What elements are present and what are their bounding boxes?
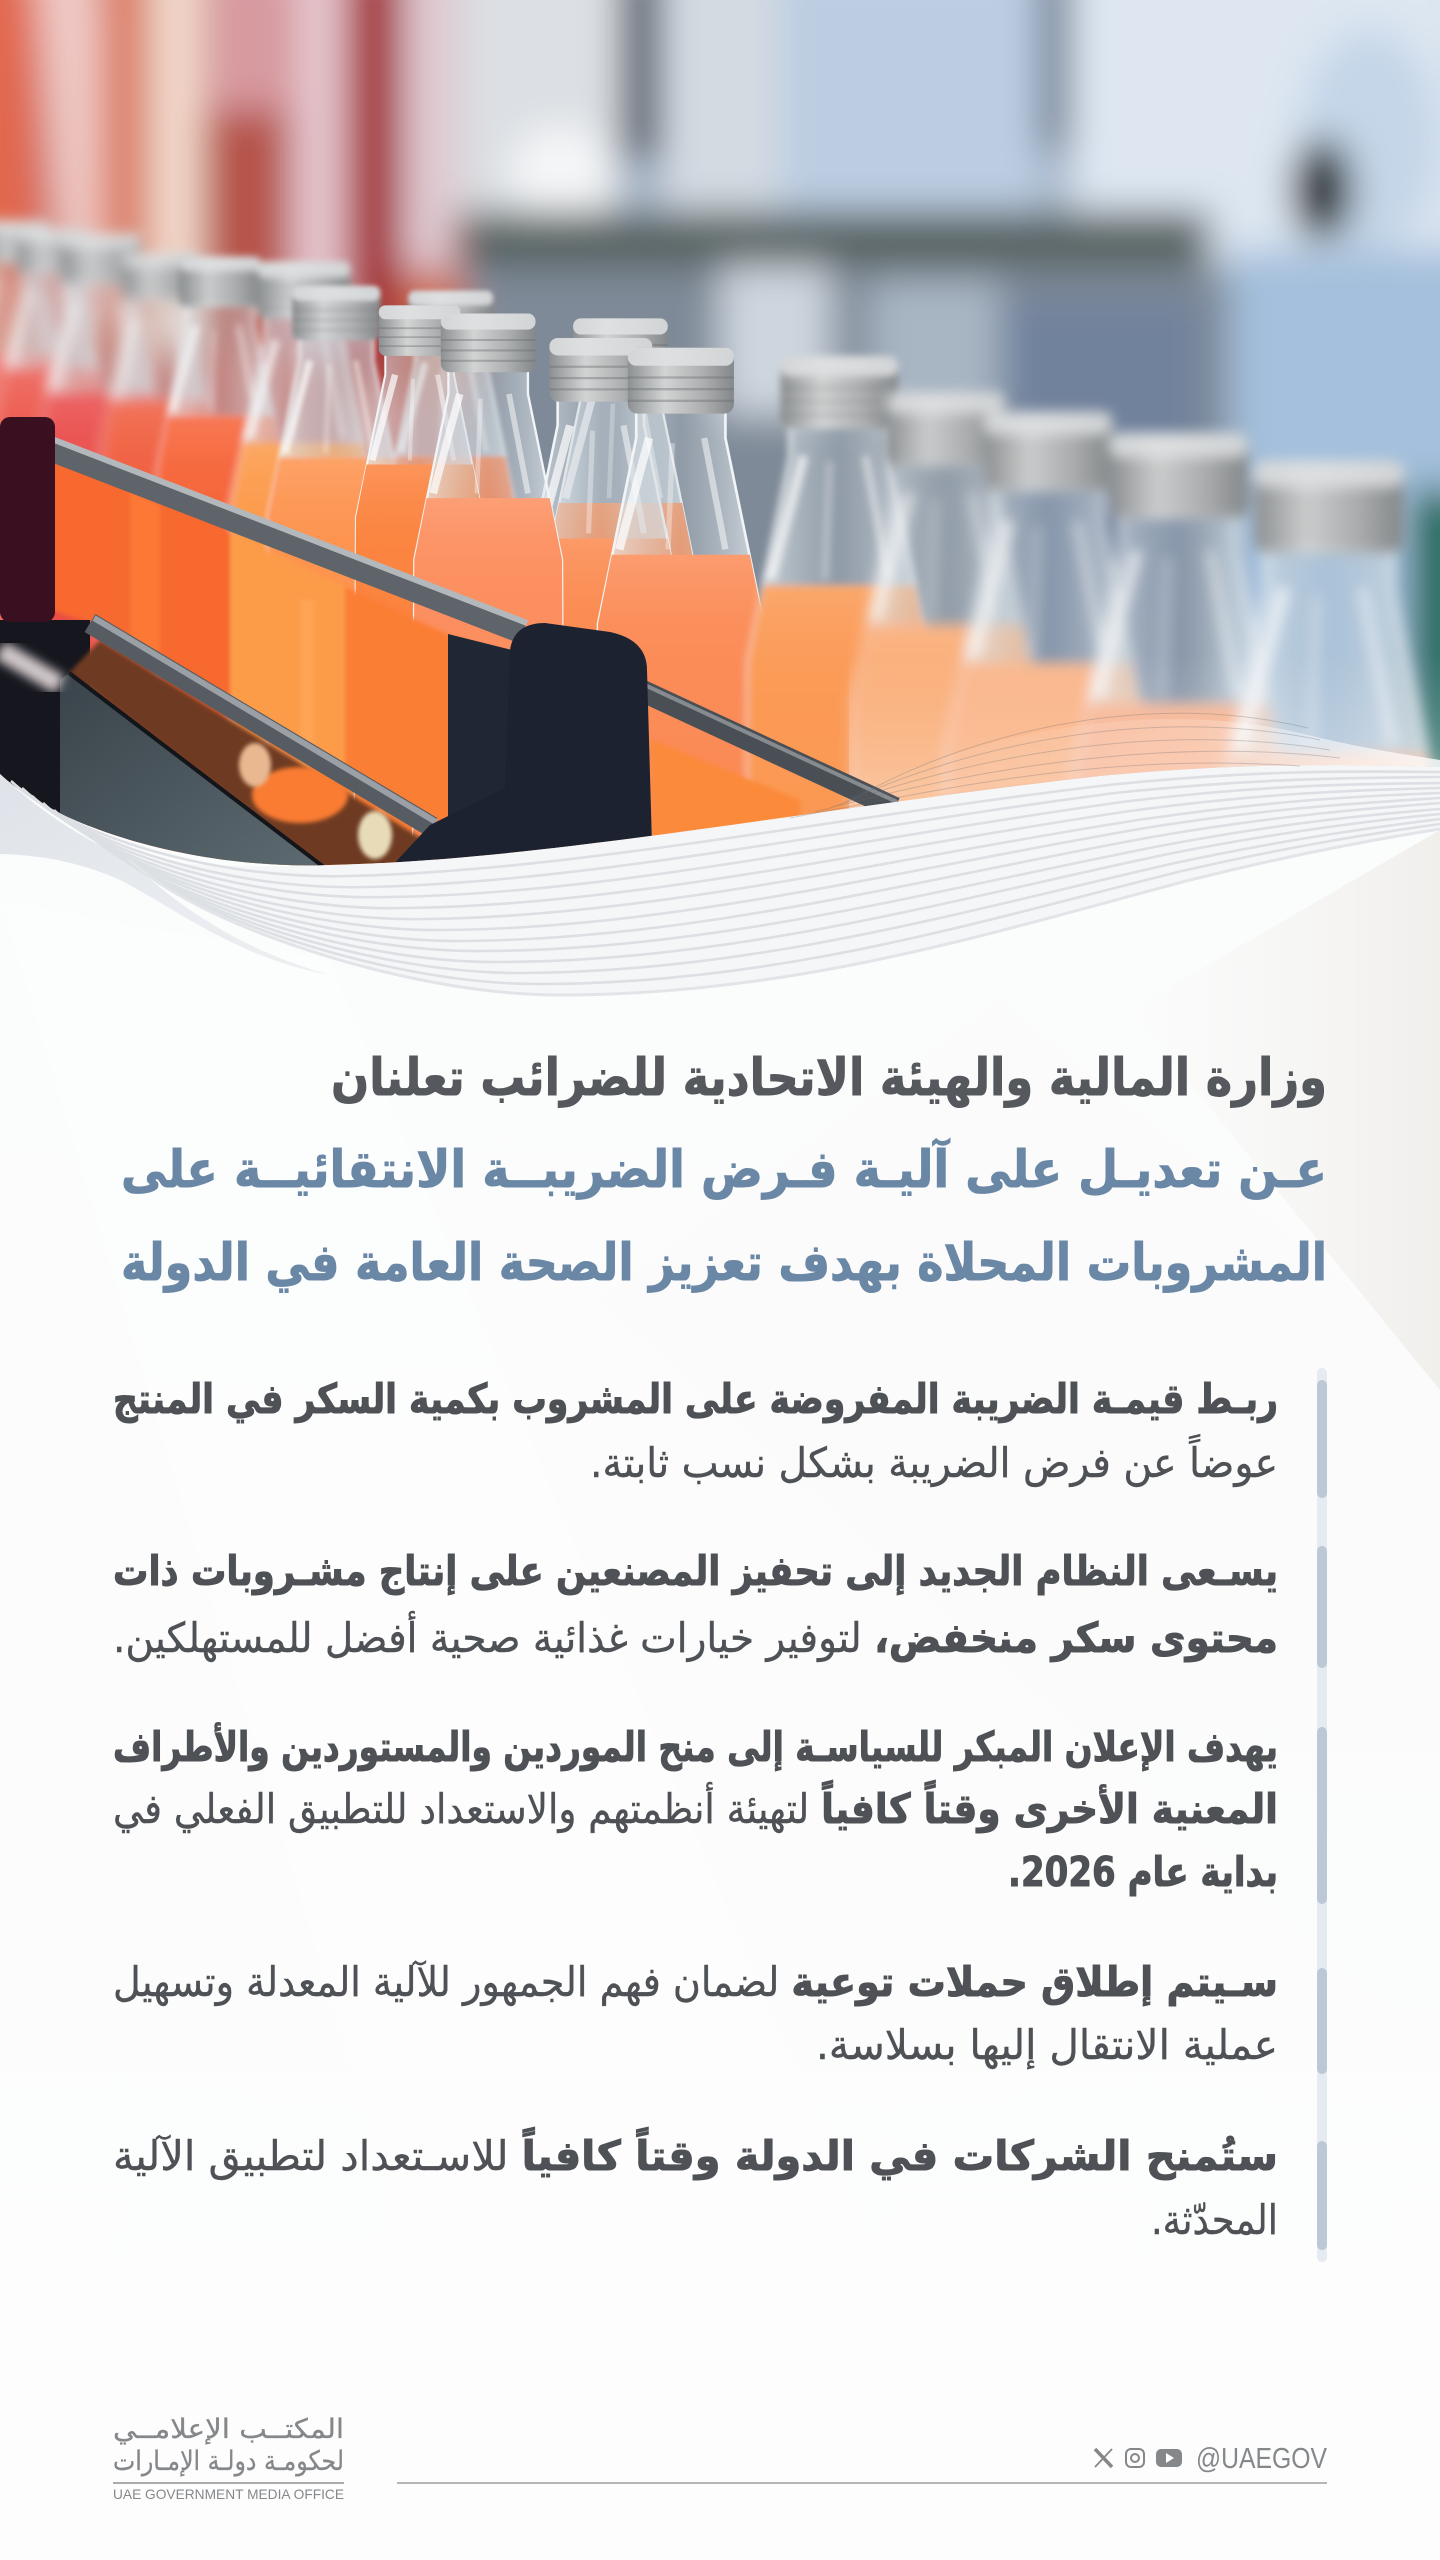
- icon: Instagram: [1126, 2449, 1144, 2467]
- heading line 1: وزارة المالية والهيئة الاتحادية للضرائب تعلنان: [331, 1049, 1327, 1108]
- social handle row: [1095, 2443, 1328, 2475]
- paragraph 1: عوضاً عن فرض الضريبة بشكل نسب ثابتة.: [590, 1434, 1278, 1487]
- conveyor base: [0, 620, 432, 880]
- paragraph 4: سـيتم إطلاق حملات توعية لضمان فهم الجمهور للآلية المعدلة وتسهيل: [113, 1958, 1278, 2007]
- icon: X: [1095, 2449, 1112, 2467]
- paragraph 2: [113, 1547, 1278, 1662]
- heading line 2: عـن تعديـل على آليـة فـرض الضريبــة الانتقائيــة على: [121, 1138, 1327, 1200]
- paragraph 2: محتوى سكر منخفض، لتوفير خيارات غذائية صحية أفضل للمستهلكين.: [113, 1611, 1278, 1662]
- handle text: @UAEGOV: [1196, 2443, 1328, 2475]
- far-left red bottles: [0, 220, 220, 854]
- side progress rail: [1317, 1368, 1327, 2262]
- paragraph 5: المحدّثة.: [1151, 2196, 1278, 2244]
- paragraph 1: [113, 1375, 1278, 1487]
- hero photo: bottles on a conveyor: [0, 0, 1440, 866]
- paragraph 3: [113, 1721, 1278, 1897]
- logo: UAE Government Media Office: [113, 2414, 344, 2502]
- lower rail: [90, 618, 436, 827]
- logo: UAE Government Media Office: المكتــب الإعلامــي: [113, 2414, 344, 2445]
- heading: [121, 1049, 1327, 1293]
- paragraph 3: بداية عام 2026.: [1008, 1848, 1278, 1897]
- upper rail: [40, 436, 897, 808]
- orange liquid behind the rails: [55, 464, 801, 836]
- icon: YouTube: [1156, 2449, 1182, 2467]
- paragraph 3: المعنية الأخرى وقتاً كافياً لتهيئة أنظمتهم والاستعداد للتطبيق الفعلي في: [113, 1780, 1278, 1834]
- paragraph 2: يسـعى النظام الجديد إلى تحفيز المصنعين على إنتاج مشـروبات ذات: [113, 1547, 1278, 1596]
- wave panel: white sheet below photo: [0, 713, 1440, 995]
- out-of-focus right bottles: [740, 352, 928, 822]
- paragraph 5: ستُمنح الشركات في الدولة وقتاً كافياً للاسـتعداد لتطبيق الآلية: [113, 2127, 1278, 2181]
- frame post: [448, 634, 512, 820]
- in-focus bottles: [262, 282, 518, 866]
- logo: UAE Government Media Office: UAE GOVERNMENT MEDIA OFFICE: [113, 2486, 344, 2502]
- blurred factory backdrop: [0, 0, 1440, 920]
- bracket: [390, 623, 652, 868]
- paragraph 4: عملية الانتقال إليها بسلاسة.: [816, 2021, 1278, 2069]
- paragraph 5: [113, 2127, 1278, 2244]
- paragraph 4: [113, 1958, 1278, 2069]
- logo: UAE Government Media Office: لحكومـة دولـة الإمـارات: [113, 2446, 344, 2477]
- footer rule: [397, 2482, 1327, 2484]
- dark post: [0, 417, 55, 622]
